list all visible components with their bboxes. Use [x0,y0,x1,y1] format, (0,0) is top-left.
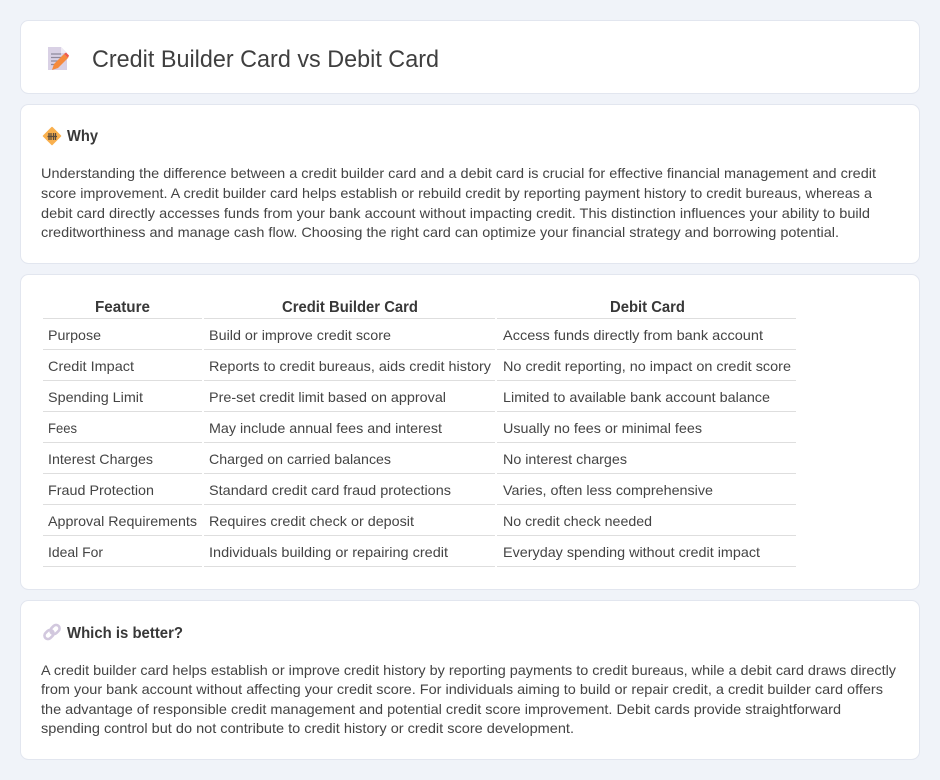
panel: which is better [20,600,920,760]
text block: why explanation: Understanding the difference between a credit builder card and a debit card is crucial for effective financial management and credit [41,165,876,181]
table row: credit impact: Credit Impact [48,358,134,374]
panel: title header [20,20,920,94]
table row: interest charges: Interest Charges [48,451,153,467]
table row: fees: Fees [48,420,77,436]
table header [95,299,685,316]
panel: comparison table [20,274,920,590]
text block: why explanation [41,165,876,240]
table row: purpose: Build or improve credit score [209,327,391,343]
table row: ideal for: Individuals building or repairing credit [209,544,448,560]
heading: why: Why [67,128,98,145]
table row: ideal for: Ideal For [48,544,103,560]
heading: which is better: Which is better? [67,625,183,642]
table row: fees: Usually no fees or minimal fees [503,420,702,436]
table row: spending limit: Spending Limit [48,389,143,405]
table row: interest charges: No interest charges [503,451,627,467]
table row: fraud protection [48,482,713,498]
panel: why [20,104,920,264]
table header: Debit Card [610,299,685,316]
table row: interest charges [48,451,627,467]
table row: approval requirements: Approval Requirements [48,513,197,529]
table row: fees [48,420,702,436]
text block: recommendation: spending control but do not contribute to credit history or credit score development. [41,720,574,736]
table row: spending limit: Pre-set credit limit based on approval [209,389,446,405]
icon: document with pencil [48,47,69,70]
table row: approval requirements [48,513,652,529]
table row: credit impact: No credit reporting, no impact on credit score [503,358,791,374]
table row: interest charges: Charged on carried balances [209,451,391,467]
table row: fees: May include annual fees and interest [209,420,442,436]
text block: recommendation [41,662,896,736]
table row: ideal for: Everyday spending without credit impact [503,544,760,560]
table row: approval requirements: Requires credit check or deposit [209,513,414,529]
table row: credit impact: Reports to credit bureaus, aids credit history [209,358,491,374]
table row: purpose [48,327,763,343]
table row: approval requirements: No credit check needed [503,513,652,529]
text block: recommendation: the advantage of responsible credit management and potential credit score improvement. Debit cards provide straightforward [41,701,841,717]
icon: warning diamond [44,128,60,144]
table row: credit impact [48,358,791,374]
table row: spending limit [48,389,770,405]
text block: recommendation: A credit builder card helps establish or improve credit history by reporting payments to credit bureaus, while a debit card draws directly [41,662,896,678]
table row: purpose: Purpose [48,327,101,343]
title: Credit Builder Card vs Debit Card [92,46,439,73]
table row: fraud protection: Fraud Protection [48,482,154,498]
table header: Credit Builder Card [282,299,418,316]
table row: fraud protection: Varies, often less comprehensive [503,482,713,498]
table row: purpose: Access funds directly from bank account [503,327,763,343]
table row: spending limit: Limited to available bank account balance [503,389,770,405]
text block: why explanation: debit card directly accesses funds from your bank account without impacting credit. This distinction influences your ability to build [41,205,870,221]
text block: why explanation: creditworthiness and manage cash flow. Choosing the right card can optimize your financial strategy and borrowing potential. [41,224,839,240]
table row: ideal for [48,544,760,560]
text block: recommendation: from your bank account without affecting your credit score. For individuals aiming to build or repair credit, a credit builder card offers [41,681,883,697]
text block: why explanation: score improvement. A credit builder card helps establish or rebuild credit by reporting payment history to credit bureaus, whereas a [41,185,872,201]
table header: Feature [95,299,150,316]
table row: fraud protection: Standard credit card fraud protections [209,482,451,498]
icon: chain link [43,623,61,641]
